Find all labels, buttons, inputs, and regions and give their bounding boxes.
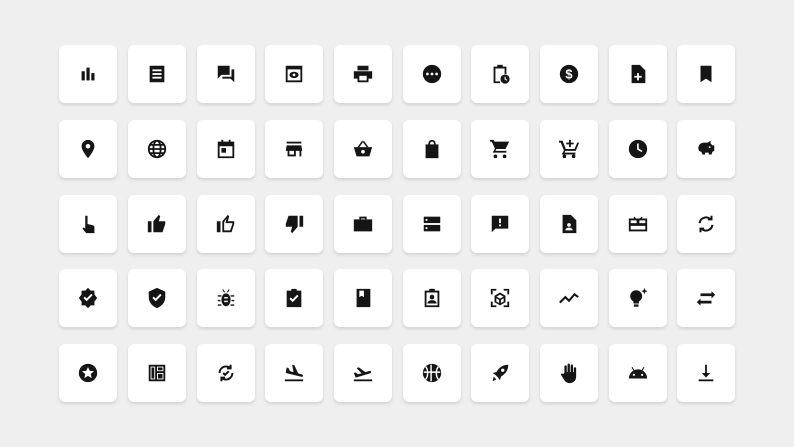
icon: pending clipboard: [471, 45, 529, 103]
icon: touch: [59, 195, 117, 253]
icon: thumb up: [128, 195, 186, 253]
icon: basket: [334, 120, 392, 178]
icon: shield check: [128, 269, 186, 327]
icon: add to cart: [540, 120, 598, 178]
icon: briefcase: [334, 195, 392, 253]
icon: store: [265, 120, 323, 178]
icon: rocket: [471, 344, 529, 402]
icon: note add: [609, 45, 667, 103]
icon: calendar: [197, 120, 255, 178]
icon: bag: [403, 120, 461, 178]
icon: piggy bank: [677, 120, 735, 178]
icon: download: [677, 344, 735, 402]
icon: bar chart: [59, 45, 117, 103]
icon: sync: [677, 195, 735, 253]
icon: thumb down: [265, 195, 323, 253]
icon: contact doc: [540, 195, 598, 253]
icon: flight takeoff: [334, 344, 392, 402]
icon: hand: [540, 344, 598, 402]
icon: storage: [403, 195, 461, 253]
icon: gift card: [609, 195, 667, 253]
icon: receipt: [128, 45, 186, 103]
icon: dollar: $: [565, 67, 573, 82]
icon: star circle: [59, 344, 117, 402]
icon: bookmark: [677, 45, 735, 103]
icon: flight landing: [265, 344, 323, 402]
icon: contact badge: [403, 269, 461, 327]
icon: trending: [540, 269, 598, 327]
icon: bug: [197, 269, 255, 327]
icon: dollar: [540, 45, 598, 103]
icon: basketball: [403, 344, 461, 402]
icon: verified: [59, 269, 117, 327]
icon: clock: [609, 120, 667, 178]
icon: swap: [677, 269, 735, 327]
icon: view in AR: [471, 269, 529, 327]
icon: assignment done: [265, 269, 323, 327]
icon: lightbulb sparkle: [609, 269, 667, 327]
icon: chat: [197, 45, 255, 103]
icon: globe: [128, 120, 186, 178]
icon: thumb up outline: [197, 195, 255, 253]
icon: more: [403, 45, 461, 103]
icon: book: [334, 269, 392, 327]
icon: printer: [334, 45, 392, 103]
icon: place: [59, 120, 117, 178]
icon: sync check: [197, 344, 255, 402]
icon: android: [609, 344, 667, 402]
icon: cart: [471, 120, 529, 178]
icon: dashboard: [128, 344, 186, 402]
icon: preview: [265, 45, 323, 103]
icon: feedback: [471, 195, 529, 253]
